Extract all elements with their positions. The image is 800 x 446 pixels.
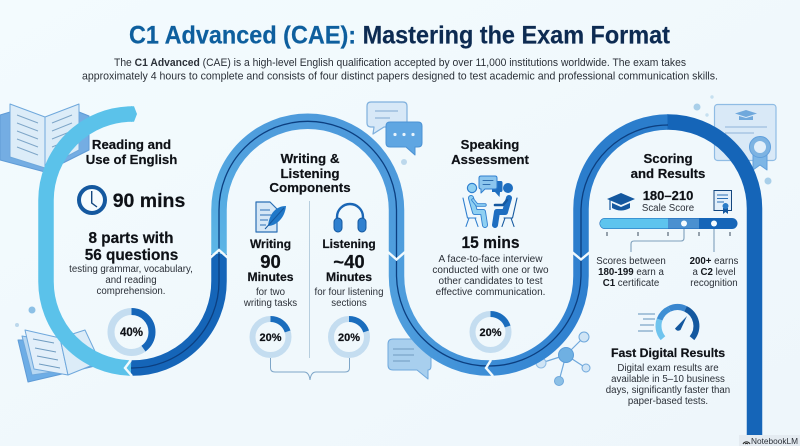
note: C2 recognition: recognition	[690, 278, 738, 289]
icon: clock	[79, 187, 105, 213]
ribbon: scoring left	[581, 122, 668, 258]
panel: scoring and results	[596, 151, 739, 407]
duration: 90 mins: 90 mins	[113, 190, 185, 212]
ribbon: chevrons	[125, 250, 590, 376]
ribbon: speaking right	[488, 258, 581, 368]
heading: writing and listening	[269, 151, 351, 195]
icon: speech bubble bottom	[388, 339, 431, 379]
description: digital results: days, significantly faster than	[606, 385, 730, 396]
donut: writing 20%: 20%	[259, 332, 282, 344]
note: C1 certificate	[596, 256, 666, 289]
icon: headphones	[334, 204, 366, 232]
panel: speaking assessment	[432, 137, 549, 350]
listening column: ~40	[333, 251, 365, 272]
heading: fast digital results: Fast Digital Results	[611, 346, 725, 360]
ribbon: scoring right	[668, 122, 755, 446]
timeline ribbon	[46, 106, 755, 446]
intro text: approximately 4 hours to complete and consists of four distinct papers designed to test academic and professional communication skills.	[82, 70, 718, 82]
icon: open book bottom left	[15, 306, 100, 382]
heading: writing and listening: Components	[269, 180, 351, 195]
ribbon: reading light segment	[46, 114, 132, 368]
description: speaking: other candidates to test	[439, 276, 543, 287]
panel: reading and use of english	[69, 137, 193, 352]
ribbon: reading tip	[131, 106, 137, 122]
writing column: 90	[260, 251, 281, 272]
writing column: Minutes	[247, 270, 294, 284]
heading: reading	[86, 137, 177, 167]
description: speaking	[432, 254, 549, 298]
note: C1 certificate: 180-199 earn a	[598, 267, 664, 278]
ribbon: inner lines	[131, 121, 668, 368]
ribbon: reading dark segment	[131, 254, 219, 368]
heading: reading: Use of English	[86, 152, 177, 167]
stat: parts and questions: 56 questions	[85, 247, 178, 264]
heading: scoring: and Results	[631, 166, 705, 181]
icon: speedometer	[638, 307, 696, 338]
description: digital results: paper-based tests.	[628, 396, 708, 407]
heading: speaking	[451, 137, 529, 167]
intro text: The C1 Advanced (CAE) is a high-level English qualification accepted by over 11,000 institutions worldwide. The exam takes	[114, 57, 686, 69]
heading: speaking: Assessment	[451, 152, 529, 167]
score range: 180–210	[643, 188, 693, 203]
title: C1 Advanced (CAE): Mastering the Exam Format	[129, 22, 671, 50]
icon: certificate document	[714, 190, 732, 214]
donut: speaking 20%	[472, 314, 508, 350]
panel: writing and listening	[243, 151, 383, 380]
icon: document and quill	[256, 202, 286, 232]
writing column: writing tasks	[243, 298, 297, 309]
note: C2 recognition: 200+ earns	[690, 256, 739, 267]
note: C1 certificate: Scores between	[596, 256, 666, 267]
donut: 40%: 40%	[120, 327, 143, 339]
ribbon: speaking left	[396, 258, 488, 368]
heading: writing and listening: Listening	[280, 166, 340, 181]
donut: listening 20%: 20%	[338, 332, 360, 344]
donut: 40%	[111, 312, 152, 352]
description: speaking: effective communication.	[436, 287, 545, 298]
bracket	[270, 358, 350, 380]
description: digital results: available in 5–10 business	[611, 374, 725, 385]
note: C1 certificate: C1 certificate	[603, 278, 659, 289]
donut: speaking 20%: 20%	[479, 327, 502, 339]
description: reading: comprehension.	[97, 286, 165, 297]
score range	[642, 188, 694, 214]
description: reading: testing grammar, vocabulary,	[69, 264, 193, 275]
description: reading: and reading	[105, 275, 157, 286]
listening column: for four listening	[315, 287, 383, 298]
intro text	[82, 57, 718, 82]
score range: Scale Score	[642, 203, 694, 214]
heading: scoring	[631, 151, 705, 181]
heading: reading: Reading and	[92, 137, 171, 152]
note: C2 recognition: a C2 level	[692, 267, 736, 278]
listening column: sections	[331, 298, 367, 309]
description: digital results: Digital exam results are	[617, 363, 719, 374]
heading: scoring: Scoring	[643, 151, 693, 166]
listening column: Listening	[322, 237, 376, 251]
stat: parts and questions: 8 parts with	[88, 230, 174, 247]
description: speaking: conducted with one or two	[432, 265, 549, 276]
description: speaking: A face-to-face interview	[439, 254, 543, 265]
stat: parts and questions	[85, 230, 178, 264]
badge: NotebookLM: NotebookLM	[751, 436, 798, 446]
writing column: for two	[256, 287, 285, 298]
description: reading	[69, 264, 193, 297]
icon: network nodes	[536, 332, 590, 386]
icon: graduation cap	[607, 193, 635, 210]
description: digital results	[606, 363, 730, 407]
icon: two people talking	[463, 176, 517, 226]
icon: speech bubbles top	[367, 102, 422, 165]
heading: speaking: Speaking	[461, 137, 519, 152]
heading: writing and listening: Writing &	[281, 151, 340, 166]
duration: 15 mins: 15 mins	[462, 233, 520, 252]
writing column	[243, 237, 297, 309]
donut: listening 20%	[331, 319, 367, 355]
listening column: Minutes	[326, 270, 372, 284]
icon: open book top left	[0, 104, 89, 172]
writing column: Writing	[250, 237, 291, 251]
note: C2 recognition	[690, 256, 739, 289]
listening column	[315, 237, 383, 309]
score bar	[600, 218, 738, 252]
ribbon: writing and listening loop	[219, 121, 396, 258]
icon: certificate	[694, 95, 776, 184]
donut: writing 20%	[252, 319, 288, 355]
